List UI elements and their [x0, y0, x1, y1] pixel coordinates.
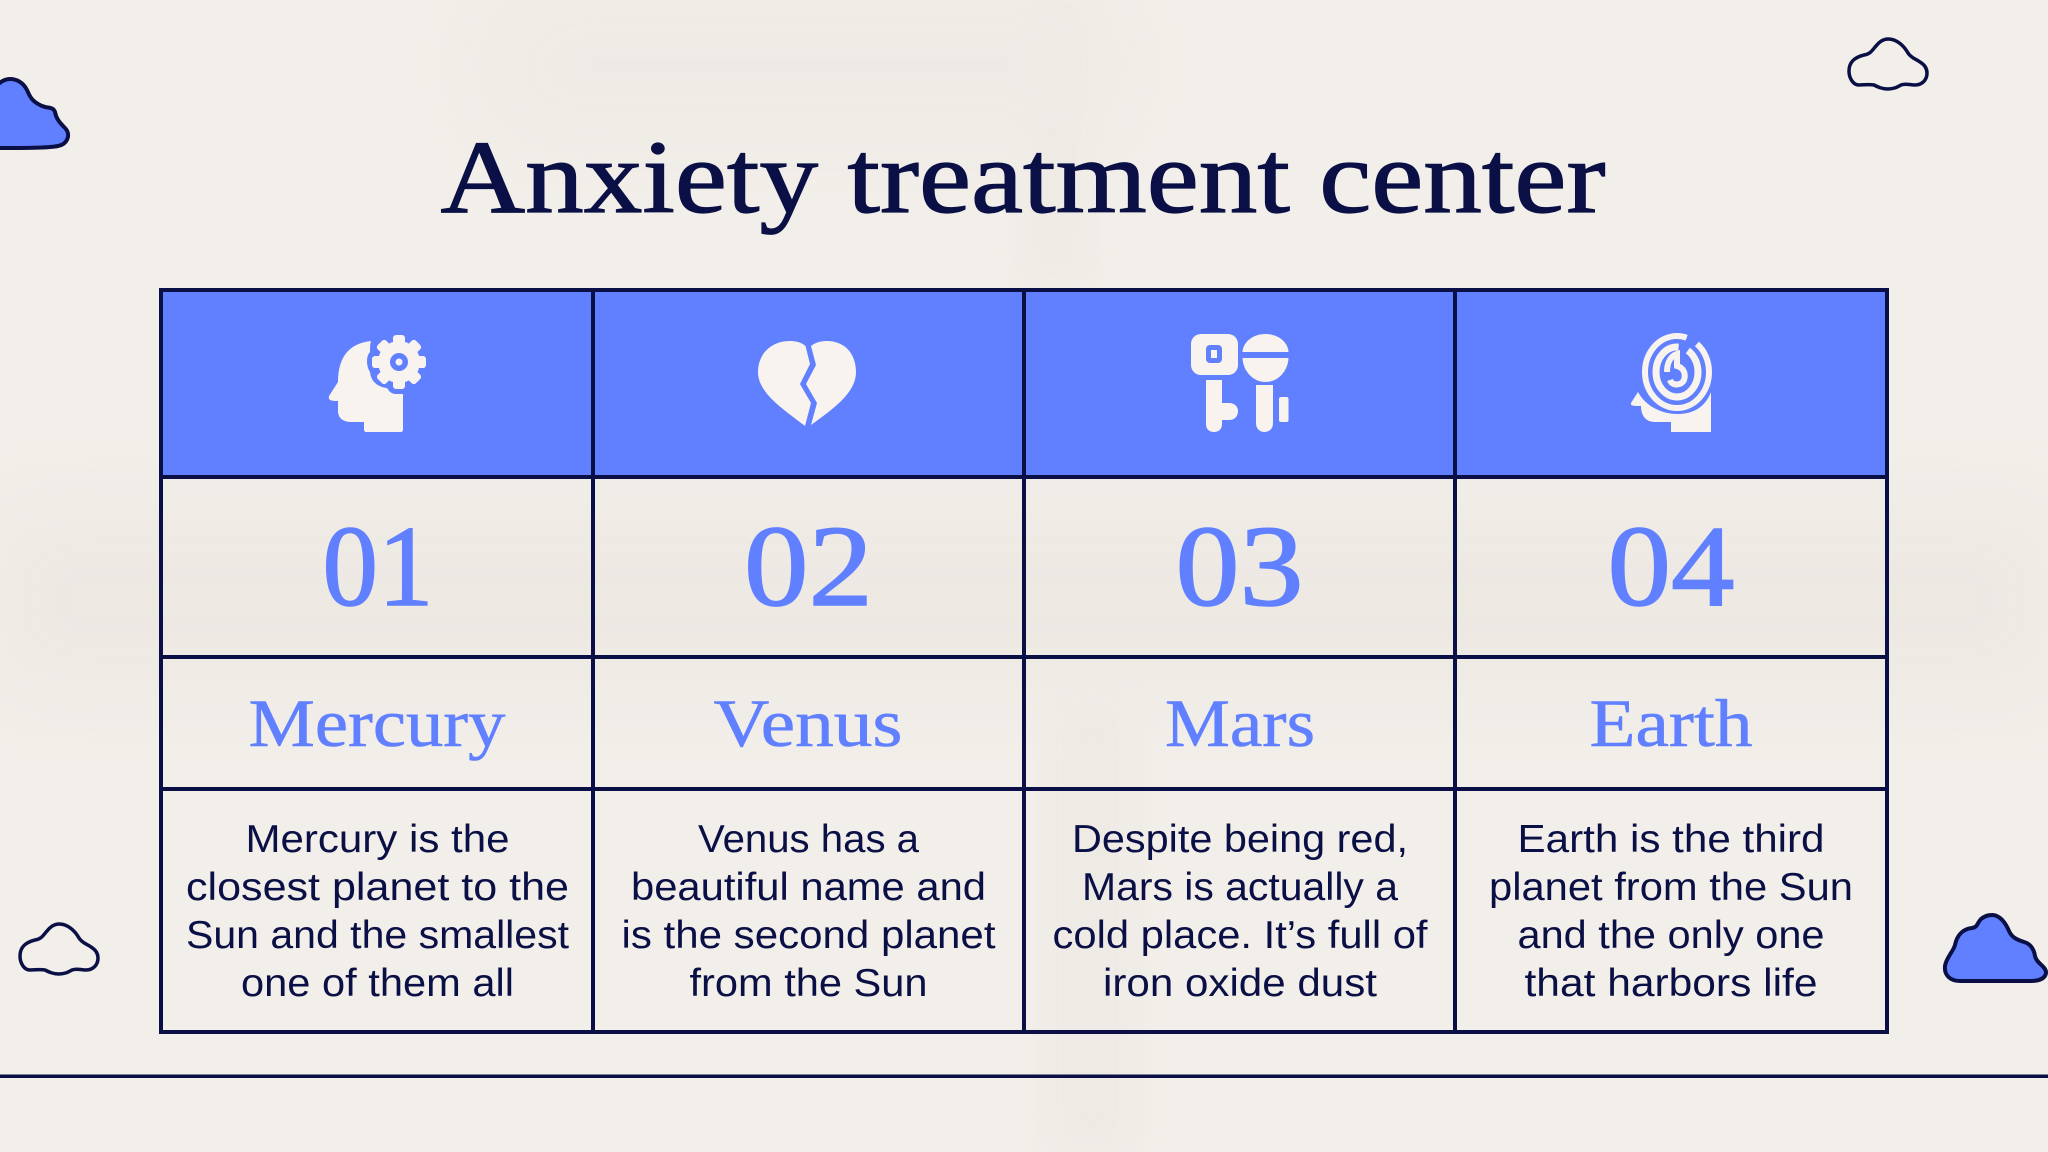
- description Earth: and the only one: [1518, 914, 1824, 957]
- description Mars: Mars is actually a: [1082, 866, 1398, 909]
- title: Anxiety treatment center: [440, 120, 1606, 235]
- description Mars: [1052, 818, 1428, 1005]
- cloud: bottom left outline: [20, 924, 98, 974]
- description Venus: Venus has a: [698, 818, 919, 861]
- description Mars: Despite being red,: [1072, 818, 1408, 861]
- description Earth: that harbors life: [1524, 962, 1818, 1005]
- description Earth: planet from the Sun: [1489, 866, 1853, 909]
- bottom rule: [0, 1074, 2048, 1078]
- number 02: 02: [744, 503, 873, 631]
- description Venus: is the second planet: [622, 914, 996, 957]
- numbers row: [322, 503, 1734, 631]
- icon: head with maze: [1631, 336, 1711, 432]
- name Venus: Venus: [714, 685, 902, 761]
- cloud: top right outline: [1849, 39, 1927, 89]
- description Earth: Earth is the third: [1518, 818, 1824, 861]
- table: [161, 290, 1887, 1032]
- number 04: 04: [1608, 503, 1734, 631]
- icon: key and microphone: [1191, 334, 1288, 432]
- description Mercury: Sun and the smallest: [186, 914, 569, 957]
- description Venus: beautiful name and: [631, 866, 986, 909]
- description Venus: [622, 818, 996, 1005]
- description Mercury: one of them all: [241, 962, 514, 1005]
- number 01: 01: [322, 503, 434, 631]
- names row: [248, 685, 1752, 761]
- name Mercury: Mercury: [248, 685, 506, 761]
- description Mars: cold place. It’s full of: [1052, 914, 1428, 957]
- description Mars: iron oxide dust: [1103, 962, 1377, 1005]
- cloud: top left filled: [0, 79, 68, 148]
- description Venus: from the Sun: [690, 962, 928, 1005]
- icon: broken heart: [758, 341, 856, 426]
- description Mercury: closest planet to the: [186, 866, 569, 909]
- descriptions row: [186, 818, 1853, 1005]
- header band: [161, 290, 1887, 477]
- table grid: [161, 290, 1887, 1032]
- description Mercury: [186, 818, 569, 1005]
- cloud: bottom right filled: [1945, 915, 2046, 981]
- icon: head with gear: [329, 335, 426, 432]
- name Mars: Mars: [1165, 685, 1315, 761]
- description Mercury: Mercury is the: [246, 818, 510, 861]
- number 03: 03: [1176, 503, 1304, 631]
- description Earth: [1489, 818, 1853, 1005]
- name Earth: Earth: [1590, 685, 1752, 761]
